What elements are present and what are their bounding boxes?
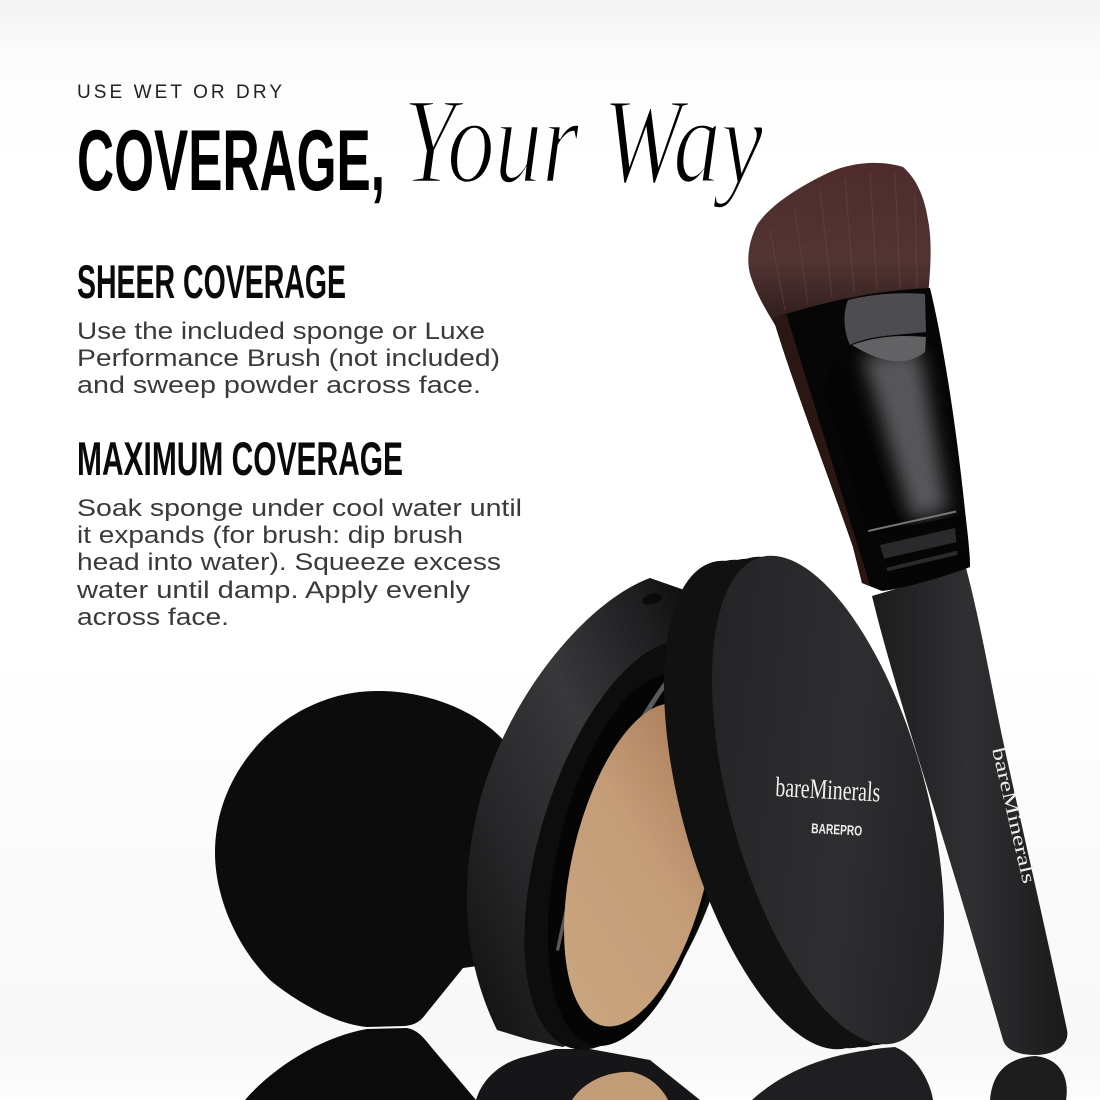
text: maximum coverage instructions: Soak sponge under cool water until	[77, 495, 522, 522]
eyebrow: use wet or dry: USE WET OR DRY	[77, 82, 282, 103]
lid product name: BAREPRO	[811, 820, 863, 839]
text: maximum coverage instructions	[76, 495, 522, 631]
pressed powder compact	[467, 578, 782, 1075]
text: sheer coverage instructions	[77, 318, 500, 399]
text: maximum coverage instructions: across face.	[77, 604, 229, 631]
text: maximum coverage instructions: head into water). Squeeze excess	[77, 549, 501, 576]
icon: black sponge	[215, 691, 520, 1027]
mirror highlight	[556, 682, 664, 951]
reflections on the surface	[245, 1028, 1067, 1100]
section: maximum coverage	[76, 432, 522, 631]
glossy inner tray	[516, 657, 754, 1063]
text: maximum coverage instructions: it expands (for brush: dip brush	[77, 522, 463, 549]
compact base ring	[467, 578, 690, 1047]
section: sheer coverage	[77, 255, 500, 399]
heading: sheer coverage: SHEER COVERAGE	[77, 255, 346, 308]
text: sheer coverage instructions: and sweep powder across face.	[77, 372, 481, 399]
brush handle	[872, 568, 1067, 1055]
text: maximum coverage instructions: water until damp. Apply evenly	[76, 577, 470, 604]
lid outer band	[618, 532, 978, 1074]
compact lid	[618, 531, 990, 1074]
text: sheer coverage instructions: Use the included sponge or Luxe	[77, 318, 485, 345]
hinge hole	[641, 592, 663, 606]
brush bristles	[748, 163, 931, 325]
title: coverage: COVERAGE,	[77, 113, 385, 209]
heading: maximum coverage: MAXIMUM COVERAGE	[77, 432, 403, 485]
title script: your way: Your Way	[403, 74, 764, 209]
inner dark step	[482, 615, 782, 1075]
text: sheer coverage instructions: Performance Brush (not included)	[77, 345, 500, 372]
lid front face	[666, 531, 990, 1069]
powder pan	[537, 689, 743, 1041]
brush ferrule	[773, 288, 970, 591]
lid logo: bareMinerals	[775, 772, 881, 808]
makeup brush	[748, 163, 1067, 1055]
brush handle logo: bareMinerals	[987, 745, 1039, 886]
